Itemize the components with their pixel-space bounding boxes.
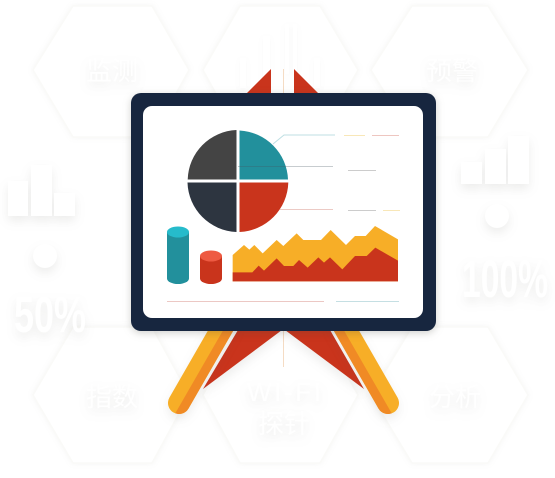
label: 分析: 分析 bbox=[429, 382, 481, 412]
hexagon: 监测 bbox=[33, 6, 189, 137]
hexagon: 分析 bbox=[371, 327, 528, 463]
label: 监测: 监测 bbox=[86, 56, 138, 86]
bar icon: right bbox=[461, 136, 529, 184]
label: 指数: 指数 bbox=[86, 382, 138, 412]
hexagon: 指数 bbox=[33, 327, 189, 463]
bar icon: left bbox=[8, 165, 75, 216]
easel top: red triangles bbox=[246, 69, 319, 94]
easel bottom: red triangles bbox=[203, 330, 364, 389]
area chart bbox=[233, 226, 398, 281]
label: 预警: 预警 bbox=[426, 56, 478, 86]
legend lines bbox=[167, 135, 400, 302]
easel centre line bbox=[282, 69, 284, 367]
hexagon: 预警 bbox=[371, 6, 528, 137]
pie chart bbox=[188, 130, 288, 232]
dot: right bbox=[485, 204, 509, 228]
easel leg: left bbox=[179, 323, 225, 403]
board bbox=[131, 93, 436, 331]
stat: 50%: 50% bbox=[14, 286, 86, 343]
label: WI-FI: WI-FI bbox=[247, 377, 321, 407]
board screen bbox=[143, 106, 423, 318]
hexagon: WI-FI 探针 bbox=[203, 327, 358, 463]
cylinder: red bbox=[200, 250, 222, 284]
icon: faint white bars bbox=[240, 24, 320, 88]
cylinder: teal bbox=[167, 226, 189, 284]
easel leg: right bbox=[342, 323, 388, 403]
label: 探针: 探针 bbox=[258, 409, 310, 439]
dot: left bbox=[33, 244, 57, 268]
hexagon: top middle bbox=[203, 6, 358, 137]
